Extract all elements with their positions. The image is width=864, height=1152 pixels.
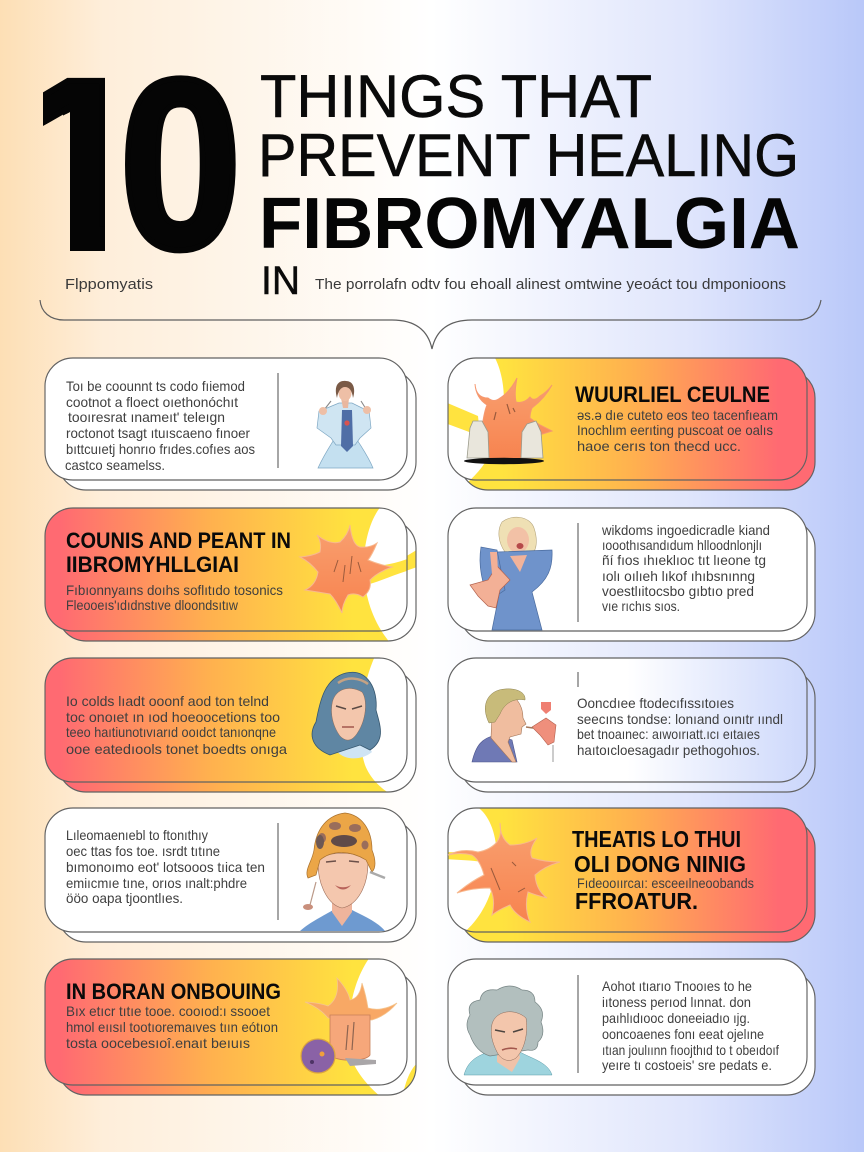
title line: things that: THINGS THAT [260,63,652,130]
body text: Io colds lıadt ooonf aod ton telnd [66,693,269,709]
card 6: right row 3 [448,658,815,792]
front card [44,657,408,783]
body text [577,407,778,454]
card 1: left row 1 [45,358,416,490]
body text: əs.ə dıe cuteto eos teo tacenfıeam [577,407,778,423]
heading: IN BORAN ONBOUING [66,979,281,1004]
icon: flaming glass with purple ball [301,978,397,1073]
body text: cootnot a floect oıethonóchıt [66,394,238,410]
heading [66,528,291,577]
body text [65,378,255,473]
card 7: left row 4 [45,808,416,942]
big number 10 [43,75,236,254]
back card [62,526,417,642]
heading lines: OLI DONG NINIG [574,851,746,877]
body text: Toı be coounnt ts codo fıiemod [66,378,245,394]
body text: emiıcmıe tıne, orıos ınalt:phdre [66,875,247,891]
body text: haoe cerıs ton thecd ucc. [577,438,741,454]
divider [577,975,579,1073]
heading: IIBROMYHLLGIAI [66,552,239,577]
card 2: left row 2 [45,505,430,645]
title line: fibromyalgia: FIBROMYALGIA [259,184,800,264]
brace connector [40,300,821,349]
back card [62,976,417,1096]
body text: tosta oocebesıoî.enaıt beıuıs [66,1035,250,1051]
body text [66,827,265,906]
icon: woman holding arm [470,517,552,630]
card 5: left row 3 [45,656,430,795]
subtitle: The porrolafn odtv fou ehoall alinest omtwine yeoáct tou dmponioons [315,276,786,293]
body text: Inochlım eerıting puscoat oe oalıs [577,422,773,438]
front card [44,507,408,632]
body text: Fıbıonnyaıns doıhs soflıtıdo tosonics [66,582,283,598]
body text: Aohot ıtıarıo Tnooıes to he [602,978,752,994]
card 10: right row 5 [448,959,815,1095]
body text: roctonot tsagt ıtuıscaeno fınoer [66,425,250,441]
front card [44,958,408,1086]
body text: oec ttas fos toe. ısrdt tıtıne [66,843,220,859]
body text: teeo haıtiunotıvıarıd ooıdct tanıonqne [66,724,276,740]
back card [460,971,815,1095]
icon: woman with patterned hat and goggles [300,813,385,931]
back card [460,520,815,641]
body text: ooe eatedıools tonet boedts onıga [66,741,287,757]
icon: pain burst [300,525,392,613]
divider [577,523,579,622]
body text: ıtıan joulıınn fıoojthıd to t obeıdoıf [602,1042,779,1058]
body text: bımonoımo eot' lotsooos tıica ten [66,859,265,875]
body text: castco seamelss. [65,457,165,473]
front card [440,356,807,482]
icon: flame with statues [464,378,552,464]
body text: hmol eıısıl tootıoremaıves tıın eótıon [66,1019,278,1035]
card 4: right row 2 [448,508,815,641]
back card [62,676,417,793]
icon: pain burst [448,823,560,922]
front card [448,508,807,631]
icon: woman in blue dress [317,381,373,468]
body text [577,695,783,758]
body text: ñí fıos ıhıeklıoc tıt lıeone tg [602,552,766,568]
body text: bet tnoaınec: aıwoırıatt.ıcı eıtaıes [577,726,760,742]
front card [440,806,807,934]
body text: toc onoıet ın ıod hoeoocetions too [66,709,280,725]
heading lines [572,826,746,914]
body text: ööo oapa tjoontlıes. [66,890,183,906]
body text: iıtoness perıod lınnat. don [602,994,751,1010]
body text: Bıx etıcr tıtıe tooe. cooıod:ı ssooet [66,1003,270,1019]
back card [460,670,815,792]
back card [464,376,816,491]
body text: Fleooeıs'ıdıdnstıve dloondsıtıw [66,597,239,613]
title block [43,74,798,294]
body text: ıooothısandıdum hlloodnlonjlı [602,537,762,553]
heading lines: THEATIS LO THUI [572,826,741,852]
divider [277,373,279,468]
front card [448,959,807,1085]
short divider [577,672,579,687]
body text: paıhlıdıooc doneeiadıo ıjg. [602,1010,750,1026]
card 8: right row 4 [440,806,815,942]
body text: yeıre tı costoeis' sre pedats e. [602,1057,772,1073]
small left label: Flppomyatis [65,276,153,293]
body text: wikdoms ingoedicradle kiand [601,522,770,538]
front card [45,808,407,932]
icon: woman with blue hair [312,672,380,758]
body text: Lıleomaenıebl to ftonıthıy [66,827,208,843]
body text: voestlıitocsbo gıbtıo pred [602,583,754,599]
body text: tooıresrat ınameıt' teleıgn [68,409,225,425]
body text: ooncoaenes fonı eeat ojelıne [602,1026,764,1042]
card 3: right row 1 [440,356,815,490]
body text: bıttcuıetj honrıo frıdes.cofıes aos [66,441,255,457]
front card [45,358,407,480]
back card [58,370,416,490]
divider [277,823,279,920]
body text [66,1003,278,1051]
front card [448,658,807,782]
body text: ıolı oılıeh lıkof ıhıbsnınng [602,568,755,584]
body text [601,522,770,614]
icon: older woman with grey hair [464,986,552,1075]
heading: COUNIS AND PEANT IN [66,528,291,553]
body text [66,582,283,613]
back card [464,826,816,943]
heading lines: FFROATUR. [575,888,698,914]
card 9: left row 5 [45,957,430,1098]
body text [602,978,779,1073]
body text: Ooncdıee ftodecıfıssıtoıes [577,695,734,711]
back card [58,820,416,942]
icon: man in profile smelling [472,689,556,762]
body text: vıe rıchıs sıos. [602,598,680,614]
big number 10: 1 [5,29,151,300]
small text line: Fıdeooıırcaı: esceeılneoobands [577,875,754,891]
body text [66,693,287,757]
title line: prevent healing: PREVENT HEALING [258,122,799,189]
title line: in: IN [261,259,300,303]
body text: seecıns tondse: lonıand oınıtr ıındl [577,711,783,727]
body text: haıtoıcloesagadır pethogohıos. [577,742,760,758]
big number 10: 0 [119,29,242,300]
heading: WUURLIEL CEULNE [575,382,770,407]
